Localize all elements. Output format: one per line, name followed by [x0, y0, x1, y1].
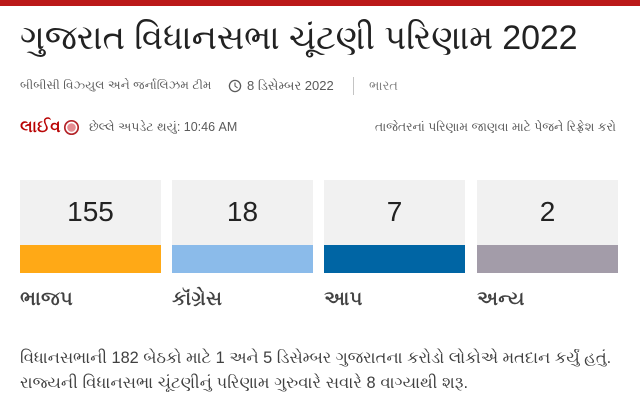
category: ભારત [369, 78, 398, 93]
Others seats: 2 [540, 196, 555, 227]
summary paragraph: વિધાનસભાની 182 બેઠકો માટે 1 અને 5 ડિસેમ્બર ગુજરાતના કરોડો લોકોએ મતદાન કર્યું હતું. [20, 349, 611, 367]
Congress seats: 18 [227, 196, 258, 227]
AAP seats [324, 180, 465, 245]
live label: લાઈવ [20, 117, 61, 136]
byline: બીબીસી વિઝ્યુલ અને જર્નાલિઝમ ટીમ [20, 78, 212, 92]
BJP seats: 155 [67, 196, 114, 227]
result: BJP [20, 180, 161, 310]
Congress seats [172, 180, 313, 245]
AAP label: આપ [324, 288, 362, 310]
AAP colour bar [324, 245, 465, 273]
result: Others [477, 180, 618, 310]
title: ગુજરાત વિધાનસભા ચૂંટણી પરિણામ 2022 [20, 19, 577, 57]
icon: clock [228, 80, 242, 92]
date: 8 ડિસેમ્બર 2022 [247, 78, 334, 93]
BJP label: ભાજપ [20, 288, 73, 310]
AAP seats: 7 [387, 196, 402, 227]
top red bar [0, 0, 640, 6]
Congress colour bar [172, 245, 313, 273]
result: Congress [172, 180, 313, 310]
icon: live indicator [64, 120, 80, 135]
Others seats [477, 180, 618, 245]
divider [353, 77, 354, 95]
last updated: છેલ્લે અપડેટ થયું: 10:46 AM [89, 120, 237, 134]
summary paragraph [20, 348, 611, 392]
result: AAP [324, 180, 465, 310]
Congress label: કૉંગ્રેસ [172, 288, 222, 310]
Others colour bar [477, 245, 618, 273]
refresh note: તાજેતરનાં પરિણામ જાણવા માટે પેજને રિફ્રેશ કરો [375, 120, 616, 134]
BJP seats [20, 180, 161, 245]
Others label: અન્ય [477, 288, 524, 310]
summary paragraph: રાજ્યની વિધાનસભા ચૂંટણીનું પરિણામ ગુરુવારે સવારે 8 વાગ્યાથી શરૂ. [20, 374, 468, 392]
BJP colour bar [20, 245, 161, 273]
